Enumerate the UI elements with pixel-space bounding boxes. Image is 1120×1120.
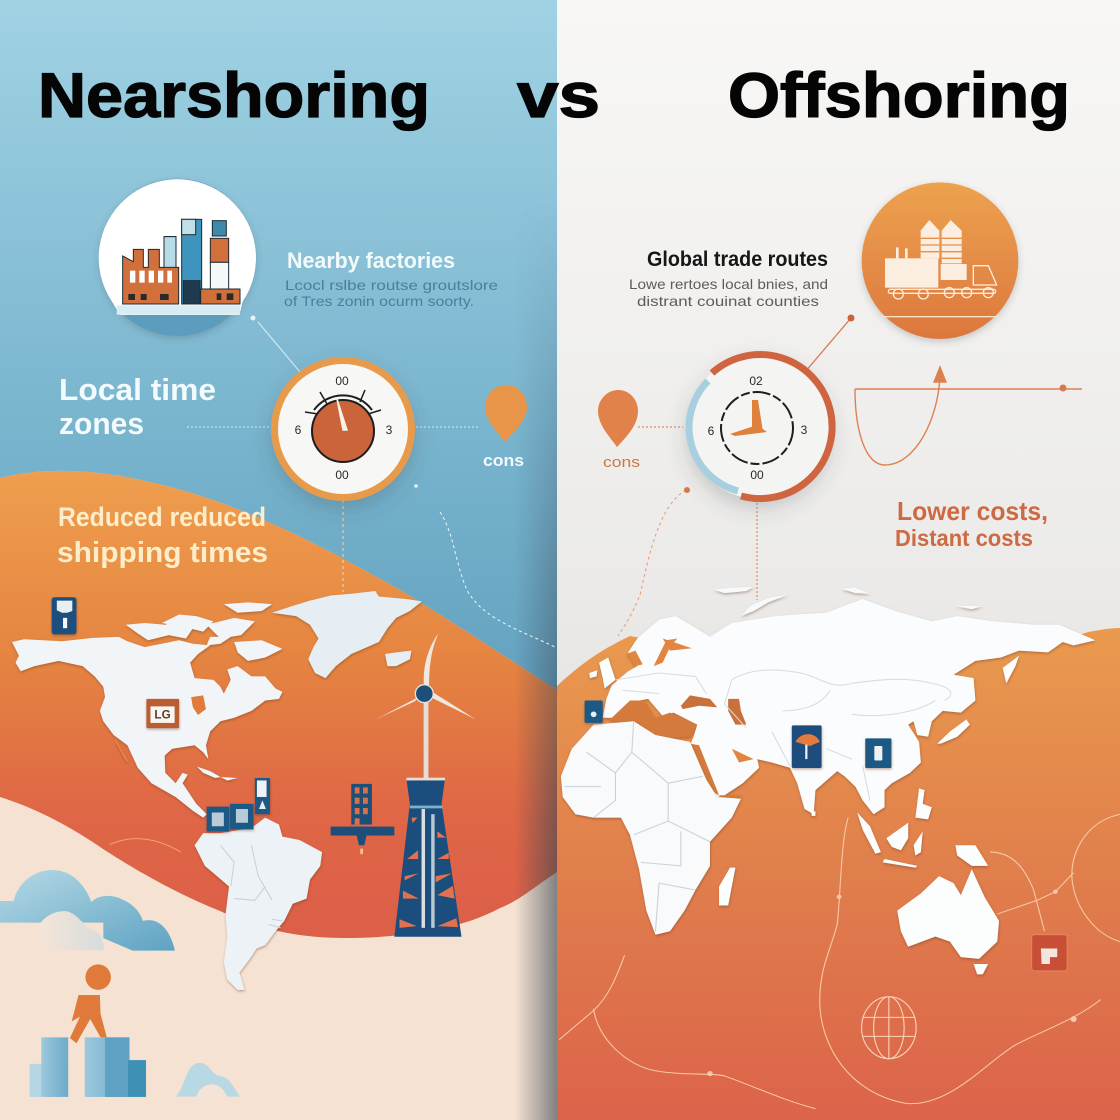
title: offshoring: Offshoring — [728, 61, 1070, 131]
icon: globe — [862, 997, 916, 1059]
icon: small hill — [176, 1063, 240, 1097]
clock: nearshoring: 00 — [335, 468, 349, 482]
clock: offshoring: 6 — [708, 424, 715, 438]
icon: map pin right with cons label: cons — [603, 454, 640, 471]
icon: badge top left — [52, 597, 76, 634]
connector lines: nearshoring — [187, 316, 557, 648]
icon: map pin left with cons label: cons — [483, 451, 524, 470]
route line: faint arc — [110, 839, 181, 852]
icon: badge on north america — [146, 699, 179, 728]
map: arctic islands — [714, 587, 1019, 683]
icon: map pin left with cons label — [483, 385, 527, 470]
heading: nearby factories: Nearby factories — [287, 248, 455, 273]
text block: global trade routes description: Lowe rertoes local bnies, and — [629, 276, 828, 292]
icon: walking figure on bars — [30, 964, 146, 1097]
heading: local time zones: zones — [59, 406, 144, 441]
chart: route curve with arrow — [855, 367, 1082, 465]
icon: badges over central america — [207, 778, 270, 831]
clock: offshoring: 3 — [801, 423, 808, 437]
clock: nearshoring: 6 — [295, 423, 302, 437]
clock: offshoring: 00 — [750, 468, 764, 482]
clock: nearshoring — [271, 357, 415, 501]
map: north america and greenland — [12, 591, 422, 818]
text block: nearby factories description: Lcocl rslbe routse groutslore — [285, 277, 498, 293]
icon: lattice tower — [394, 778, 461, 937]
map: africa — [561, 721, 741, 935]
map: eurasia — [603, 599, 1095, 814]
clock: nearshoring: 00 — [335, 374, 349, 388]
heading: lower costs — [895, 496, 1048, 551]
panel: offshoring background — [557, 0, 1120, 1120]
clock: nearshoring: 3 — [386, 423, 393, 437]
icon: badge india — [792, 725, 822, 768]
icon: badge on north america: LG — [154, 708, 171, 721]
title: nearshoring: Nearshoring — [38, 61, 430, 131]
title: vs: vs — [517, 61, 600, 131]
text block: global trade routes description — [629, 276, 828, 309]
icon: badge china — [865, 738, 891, 768]
heading: reduced shipping times: Reduced reduced — [58, 502, 266, 532]
icon: badge west africa — [585, 701, 603, 723]
clock: offshoring: 02 — [749, 374, 763, 388]
text block: nearby factories description — [284, 277, 498, 309]
connector lines: offshoring — [618, 314, 854, 636]
icon: map pin right with cons label — [598, 390, 640, 471]
map: south america — [195, 818, 322, 990]
heading: local time zones: Local time — [59, 372, 216, 407]
heading: lower costs: Lower costs, — [897, 496, 1048, 526]
heading: reduced shipping times: shipping times — [57, 537, 268, 569]
icon: clouds — [0, 870, 175, 951]
icon: nearby factory medallion — [99, 179, 256, 336]
map: islands and australia — [589, 657, 999, 974]
text block: nearby factories description: of Tres zonin ocurm soorty. — [284, 293, 474, 309]
panel: nearshoring background — [0, 0, 557, 1120]
heading: local time zones — [59, 372, 216, 441]
map and icons: eurasia africa australia — [559, 587, 1120, 1109]
icon: trade truck medallion — [862, 182, 1018, 339]
clock: offshoring — [687, 355, 832, 499]
heading: reduced shipping times — [57, 502, 268, 569]
icon: wind turbine — [375, 633, 476, 780]
icon: small building crane — [331, 784, 394, 854]
map and icons: americas — [0, 591, 476, 1097]
icon: badge pacific — [1032, 935, 1067, 971]
heading: lower costs: Distant costs — [895, 525, 1033, 551]
heading: global trade routes: Global trade routes — [647, 248, 828, 271]
text block: global trade routes description: distrant couinat counties — [637, 293, 819, 309]
route lines and globe — [559, 814, 1120, 1109]
